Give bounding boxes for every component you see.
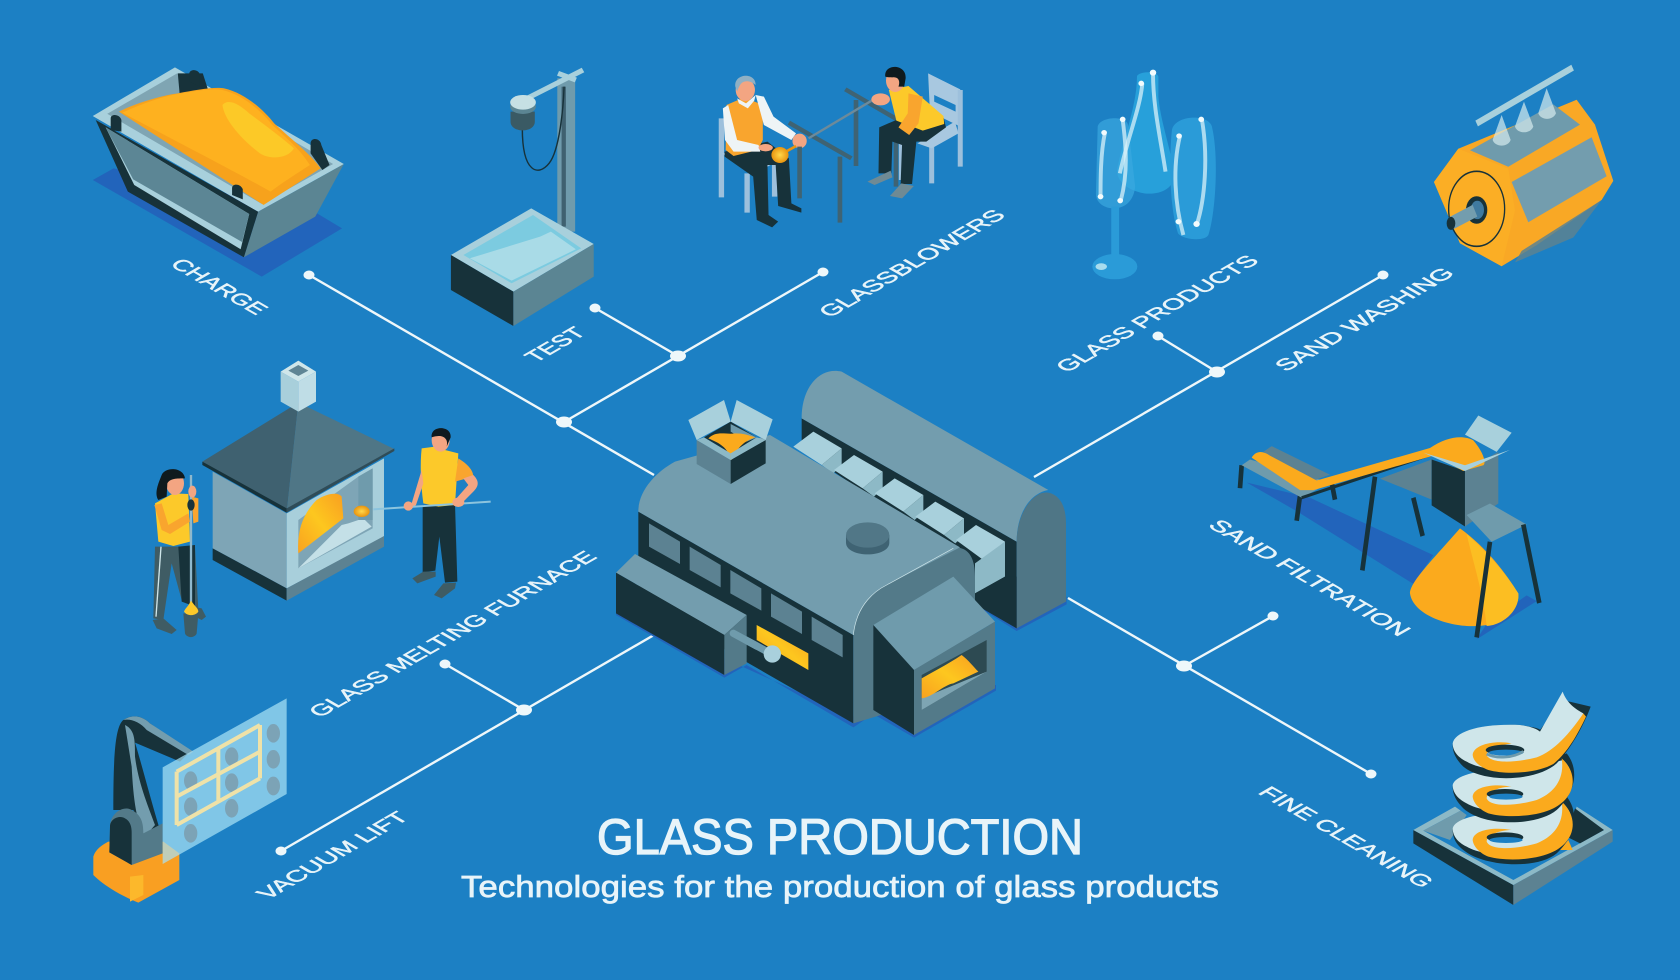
icon: vacuum lift robot (93, 698, 287, 903)
label: glassblowers: GLASSBLOWERS (813, 206, 1011, 321)
icon: charge bin (93, 67, 344, 277)
label: fine cleaning: FINE CLEANING (1253, 783, 1440, 891)
top coil and chute (1453, 692, 1591, 778)
label: charge: CHARGE (165, 255, 274, 318)
bottom coil (1453, 797, 1574, 864)
windows (649, 523, 843, 657)
main body (638, 435, 975, 723)
subtitle: Technologies for the production of glass products (461, 869, 1219, 904)
icon: melting furnace house (202, 361, 394, 601)
hopper box (688, 400, 773, 484)
icon: glass products (1092, 70, 1216, 279)
label: sand washing: SAND WASHING (1269, 264, 1460, 375)
front melting chute (873, 577, 995, 735)
label: vacuum lift: VACUUM LIFT (251, 808, 414, 903)
label: glass melting furnace: GLASS MELTING FURNACE (303, 547, 602, 721)
left glassblower (721, 76, 807, 227)
sand pile (119, 88, 321, 205)
icon: woman with ladle (153, 469, 206, 637)
icon: central glass furnace (616, 371, 1067, 738)
icon: man with blowpipe (354, 428, 491, 598)
icon: glassblowers (721, 67, 960, 227)
icon: sand filtration conveyor (1240, 415, 1539, 639)
marver table and blowpipe (789, 89, 907, 223)
low front bench (616, 554, 757, 675)
glass sheets on rollers (793, 432, 1017, 628)
icon: test tank with lamp (451, 70, 594, 326)
chimney (281, 361, 316, 412)
title: GLASS PRODUCTION (597, 809, 1083, 865)
water spray cones (1493, 88, 1556, 146)
middle coil (1453, 753, 1574, 822)
glass panel with suction frame (163, 698, 287, 864)
back hood (616, 371, 1067, 738)
connector lines (276, 268, 1388, 856)
label: test: TEST (519, 323, 591, 366)
frame (1413, 807, 1613, 905)
label: glass products: GLASS PRODUCTS (1050, 251, 1264, 376)
observation slot and lever (733, 625, 808, 670)
roof vent (846, 522, 889, 554)
label: sand filtration: SAND FILTRATION (1203, 516, 1417, 640)
right glassblower (867, 67, 960, 198)
icon: fine cleaning spiral (1413, 692, 1613, 905)
icon: sand washing drum (1434, 68, 1613, 266)
